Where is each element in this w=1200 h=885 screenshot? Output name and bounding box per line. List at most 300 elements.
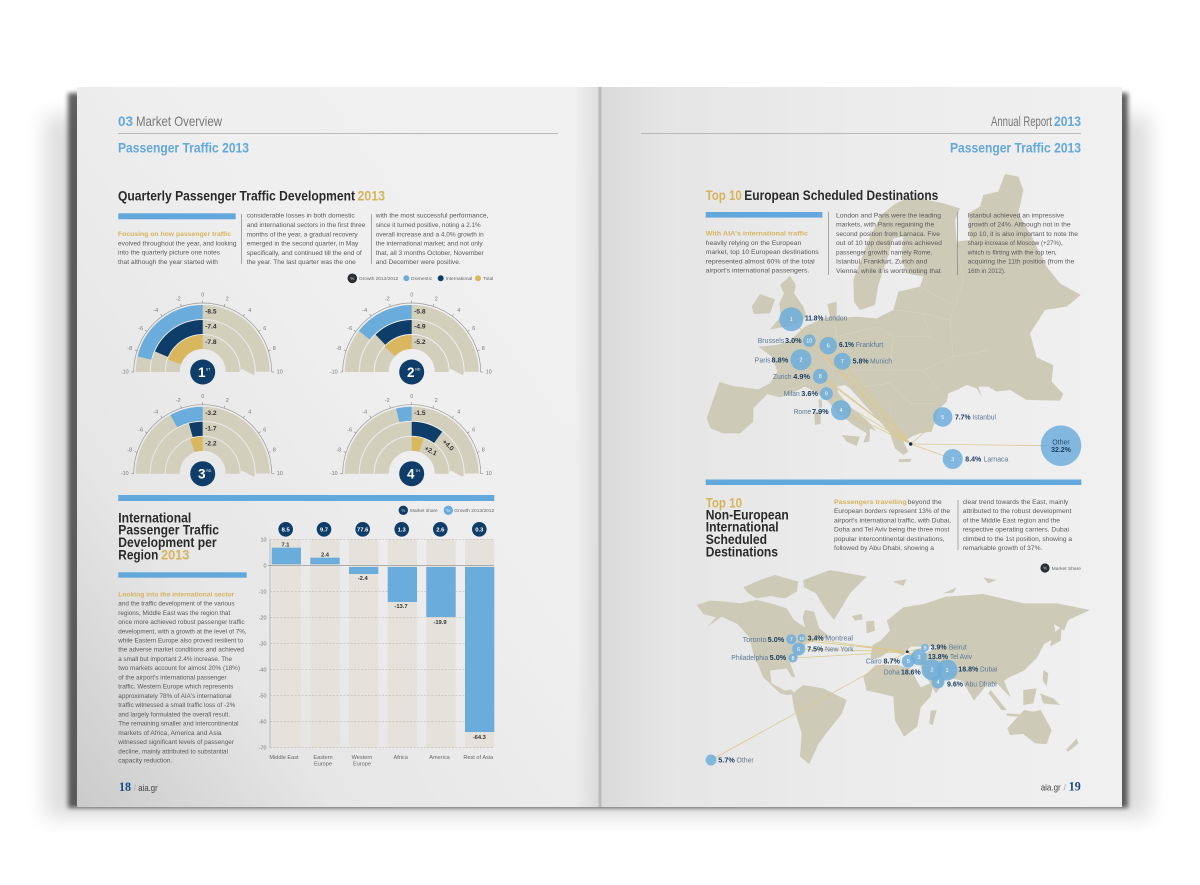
gutter shading: [575, 87, 599, 807]
heading: non-european destinations: Top 10: [706, 495, 742, 510]
text: europe: Vienna, while it is worth noting that: [836, 268, 941, 275]
body text: international sector: traffic. Western Europe which represents: [118, 684, 234, 691]
gauge: third quarter: 4: [248, 410, 251, 416]
y axis labels: -30: [259, 642, 266, 648]
region labels: [269, 755, 494, 768]
labels: european destinations: Brussels: [758, 338, 785, 345]
intro text: quarterly: evolved throughout the year, and looking: [118, 240, 237, 247]
heading: non-european destinations: Destinations: [706, 544, 778, 559]
gauge: third quarter: 3: [198, 467, 206, 482]
bar chart legend: %: [401, 508, 405, 513]
y axis labels: -40: [259, 668, 266, 674]
intro text: quarterly: emerged in the second quarter, in May: [247, 240, 359, 248]
body text: international sector: the adverse market conditions and achieved: [118, 647, 244, 654]
gauge: first quarter: -7.4: [205, 324, 217, 331]
gauge: first quarter: -4: [153, 308, 158, 314]
gauge: third quarter: 2: [226, 398, 229, 404]
body text: international sector: approximately 78% of AIA's international: [118, 693, 232, 700]
left page header: 03: [118, 114, 133, 129]
gauge: first quarter: 8: [273, 346, 276, 352]
labels: world destinations: Toronto: [743, 637, 767, 644]
gauge: third quarter: 10: [277, 471, 283, 477]
gauge: fourth quarter: -6: [347, 428, 352, 434]
bar chart legend: [399, 506, 495, 515]
intro text: quarterly: and international sectors in the first three: [247, 222, 366, 229]
heading: international passenger traffic development: Region: [118, 547, 158, 562]
text: europe: markets, with Paris regaining the: [836, 222, 935, 229]
market share legend: [1040, 563, 1081, 573]
labels: world destinations: Tel Aviv: [950, 654, 972, 661]
labels: european destinations: Other: [1052, 440, 1070, 447]
gauge: first quarter: 1: [198, 365, 206, 380]
body text: international sector: two markets account for almost 20% (18%): [118, 665, 240, 672]
gauge: fourth quarter: 2: [435, 398, 438, 404]
left page footer: /: [134, 783, 136, 793]
intro text: quarterly: the year. The last quarter was the one: [247, 259, 356, 266]
europe heading: Top 10: [706, 188, 742, 203]
bubbles: world destinations: 2: [930, 668, 934, 674]
gauge: third quarter: RD: [206, 469, 212, 473]
market share badges: [278, 522, 487, 537]
gauge: second quarter: 10: [486, 370, 492, 376]
bar chart legend: %: [446, 508, 450, 513]
text: non-european: clear trend towards the East, mainly: [963, 499, 1069, 506]
body text: international sector: [117, 572, 247, 765]
labels: european destinations: Larnaca: [984, 457, 1008, 464]
intro text: quarterly: since it turned positive, noting a 2.1%: [376, 222, 481, 229]
labels: european destinations: 6.1%: [839, 342, 855, 349]
text: europe: acquiring the 11th position (from the: [968, 258, 1075, 266]
bar chart: growth per region: [259, 522, 494, 768]
body text: international sector: while Eastern Europe also proved resilient to: [117, 638, 243, 644]
bar chart legend: Growth 2013/2012: [454, 508, 495, 514]
right page footer: [1041, 780, 1081, 794]
intro text: quarterly: [118, 213, 489, 266]
labels: european destinations: 32.2%: [1051, 447, 1072, 454]
heading: non-european destinations: Non-European: [706, 508, 789, 522]
bubbles: european destinations: 6: [827, 344, 830, 350]
region labels: Africa: [394, 755, 409, 761]
labels: european destinations: Milan: [784, 391, 800, 398]
gauge: first quarter: -8: [127, 346, 132, 352]
text: europe: out of 10 top destinations achieved: [836, 240, 942, 247]
labels: world destinations: 9.6%: [947, 682, 964, 689]
heading: international passenger traffic development: International: [118, 510, 191, 525]
labels: european destinations: 7.7%: [955, 414, 971, 421]
heading: international passenger traffic development: Development per: [118, 535, 217, 550]
page shadow: [45, 93, 1150, 818]
labels: world destinations: 3.9%: [931, 645, 947, 652]
text: non-european: beyond the: [908, 499, 942, 506]
gauge: first quarter: 10: [277, 370, 283, 376]
labels: world destinations: Philadelphia: [731, 655, 768, 662]
gauge: first quarter: -2: [176, 296, 181, 302]
right page header: Passenger Traffic 2013: [950, 141, 1081, 156]
gauge: second quarter: 2: [435, 296, 438, 302]
labels: world destinations: Montreal: [825, 635, 853, 642]
gauge: second quarter: -5.2: [414, 339, 426, 346]
labels: world destinations: Abu Dhabi: [965, 682, 997, 689]
heading: international passenger traffic development: 2013: [161, 547, 190, 562]
labels: european destinations: Istanbul: [972, 414, 996, 421]
region labels: America: [429, 755, 451, 761]
labels: european destinations: Frankfurt: [856, 342, 883, 349]
labels: european destinations: 3.6%: [801, 391, 819, 398]
text: europe: growth of 24%. Although not in the: [968, 222, 1071, 229]
bubbles: world destinations: 8: [791, 656, 795, 662]
intro text: quarterly: into the quarterly picture one notes: [118, 250, 221, 257]
bar chart legend: Market share: [410, 508, 438, 514]
bubbles: european destinations: 7: [841, 359, 844, 365]
labels: world destinations: 18.8%: [958, 667, 979, 674]
region labels: Eastern: [313, 755, 333, 761]
text: europe: represented almost 60% of the total: [706, 258, 815, 265]
gauge: second quarter: -2: [385, 296, 390, 302]
intro text: quarterly: and December were positive.: [376, 259, 461, 266]
bubbles: world destinations: [706, 634, 958, 766]
bubbles: world destinations: 1: [945, 668, 949, 674]
body text: international sector: decline, mainly attributed to substantial: [118, 748, 228, 755]
bubbles: european destinations: 1: [790, 317, 793, 323]
body text: international sector: of the airport's international passenger: [118, 674, 227, 682]
body text: international sector: once more achieved robust passenger traffic: [118, 619, 245, 626]
labels: european destinations: Munich: [870, 359, 892, 366]
gauge legend: %: [350, 276, 354, 281]
text: europe: top 10, it is also important to note the: [968, 231, 1078, 238]
labels: world destinations: 18.6%: [901, 670, 921, 677]
map: world: [697, 570, 1090, 764]
text: europe: market, top 10 European destinations: [706, 249, 819, 256]
gauge: first quarter: -7.8: [205, 339, 217, 346]
body text: international sector: The remaining smaller and intercontinental: [118, 721, 239, 728]
heading: international passenger traffic development: Passenger Traffic: [118, 522, 219, 538]
labels: world destinations: Cairo: [866, 659, 882, 666]
heading: quarterly passenger traffic development: 2013: [358, 188, 385, 203]
intro text: quarterly: Focusing on how passenger traffic: [118, 231, 231, 238]
gauge: first quarter: 2: [226, 296, 229, 302]
gauge: third quarter: 0: [201, 394, 204, 400]
heading: non-european destinations: Scheduled: [706, 532, 767, 547]
labels: world destinations: 8.7%: [884, 659, 901, 666]
gauge: fourth quarter: -10: [330, 471, 338, 477]
market share badges: 1.3: [398, 527, 407, 533]
bar values: -2.4: [358, 576, 368, 582]
bubbles: european destinations: 5: [941, 415, 944, 421]
body text: international sector: capacity reduction.: [118, 758, 172, 765]
heading: international passenger traffic development: [118, 510, 219, 562]
bar values: -64.3: [473, 735, 487, 741]
region labels: Europe: [353, 762, 371, 768]
labels: world destinations: New York: [825, 647, 854, 654]
gauge: first quarter: -8.5: [205, 308, 217, 316]
bar values: -19.9: [433, 620, 447, 626]
market share badges: 0.3: [475, 527, 484, 533]
bar values: 7.1: [281, 542, 290, 548]
text: non-european: remarkable growth of 37%.: [963, 545, 1042, 552]
heading: quarterly passenger traffic development: Quarterly Passenger Traffic Development: [118, 188, 355, 203]
labels: european destinations: 3.0%: [785, 338, 802, 345]
gauge: second quarter: 8: [482, 346, 485, 352]
labels: world destinations: 13.8%: [928, 654, 949, 661]
body text: international sector: development, with a growth at the level of 7%,: [118, 628, 247, 635]
right page footer: 19: [1069, 780, 1081, 794]
market share badges: 9.7: [320, 527, 328, 533]
body text: international sector: traffic witnessed a small traffic loss of -2%: [118, 702, 235, 709]
market share badges: 2.6: [436, 527, 445, 533]
gauge: second quarter: -6: [347, 326, 352, 332]
labels: european destinations: 5.8%: [853, 359, 869, 366]
labels: world destinations: 5.7%: [718, 757, 736, 764]
market share legend: Market Share: [1052, 566, 1081, 572]
gauge: fourth quarter: -1.5: [414, 410, 426, 417]
text: europe: second position from Larnaca. Five: [836, 231, 940, 238]
europe heading: European Scheduled Destinations: [744, 188, 938, 203]
gauge: fourth quarter: 10: [486, 471, 492, 477]
text: non-european: European borders represent 13% of the: [834, 508, 950, 515]
route lines: world: [711, 638, 947, 760]
labels: world destinations: 7.5%: [807, 647, 824, 654]
bubbles: world destinations: 4: [936, 680, 940, 686]
gauge: first quarter: ST: [206, 368, 211, 372]
body text: international sector: regions, Middle East was the region that: [118, 610, 230, 617]
bubbles: world destinations: 10: [799, 636, 805, 641]
gauge: second quarter: -4.9: [414, 324, 426, 331]
text: europe: heavily relying on the European: [706, 240, 802, 247]
bar values: -13.7: [394, 604, 408, 610]
heading: non-european destinations: [706, 495, 789, 559]
text: europe: London and Paris were the leading: [836, 212, 941, 219]
gauge: second quarter: -8: [336, 346, 341, 352]
bubbles: world destinations: 3: [917, 655, 921, 661]
y axis labels: -10: [259, 589, 266, 595]
bubbles: european destinations: 9: [825, 392, 828, 398]
market share badges: 8.5: [282, 527, 291, 533]
labels: european destinations: Zurich: [773, 374, 792, 381]
gauge: third quarter: -4: [153, 410, 158, 416]
bubbles: european destinations: [779, 307, 1081, 469]
bubbles: european destinations: 8: [819, 374, 822, 380]
text: europe: which is flirting with the top ten,: [967, 249, 1057, 256]
gauge: second quarter: 2: [407, 365, 414, 380]
gauge: second quarter: 0: [410, 292, 413, 298]
gauge: first quarter: -6: [138, 326, 143, 332]
bar values: 2.4: [321, 552, 330, 558]
y axis labels: -70: [259, 746, 266, 752]
gauge: first quarter: 6: [263, 326, 266, 332]
gauge legend: Total: [483, 276, 493, 282]
bubbles: world destinations: 5: [907, 659, 910, 665]
bubbles: world destinations: 6: [797, 647, 800, 653]
gauge: third quarter: 8: [273, 448, 276, 454]
gauge: fourth quarter: -8: [336, 448, 341, 454]
gauge: second quarter: ND: [415, 368, 421, 372]
intro text: quarterly: the international market; and not only: [376, 240, 483, 248]
y axis labels: -60: [259, 720, 266, 726]
gauge: fourth quarter: 8: [482, 448, 485, 454]
gauge legend: Domestic: [411, 276, 433, 282]
labels: european destinations: 11.8%: [805, 316, 824, 323]
labels: european destinations: 7.9%: [812, 409, 829, 416]
intro text: quarterly: months of the year, a gradual recovery: [247, 231, 358, 238]
text: non-european: popular intercontinental destinations,: [834, 536, 945, 543]
right page header: Annual Report: [991, 114, 1052, 129]
intro text: quarterly: considerable losses in both domestic: [247, 213, 355, 220]
labels: european destinations: 8.8%: [772, 358, 789, 365]
gauge: third quarter: -1.7: [205, 425, 217, 432]
right page header: [641, 114, 1081, 156]
y axis labels: -50: [259, 694, 266, 700]
bubbles: european destinations: 2: [799, 358, 803, 364]
labels: world destinations: Dubai: [980, 667, 998, 674]
gauge: third quarter: -6: [138, 428, 143, 434]
gauge legend: [348, 274, 493, 283]
region labels: Europe: [314, 762, 332, 768]
bubbles: european destinations: 10: [806, 339, 812, 345]
text: non-european: respective operating carriers. Dubai: [963, 527, 1069, 534]
gauge: second quarter: 6: [472, 326, 475, 332]
text: non-european: Doha and Tel Aviv being the three most: [834, 527, 949, 534]
text: non-european: climbed to the 1st position, showing a: [963, 536, 1072, 543]
gauge: fourth quarter: -2: [385, 398, 390, 404]
right page footer: aia.gr: [1041, 783, 1061, 794]
right page footer: /: [1064, 783, 1066, 793]
gauge: fourth quarter: -4: [362, 410, 367, 416]
text: non-european: attributed to the robust development: [963, 508, 1072, 515]
map: Europe: [707, 174, 1081, 462]
gauge: fourth quarter: 4: [407, 467, 415, 482]
bar values: [281, 542, 487, 741]
labels: world destinations: Doha: [884, 670, 900, 677]
gauge: first quarter: -10: [121, 370, 129, 376]
y axis labels: [259, 537, 266, 752]
labels: world destinations: Other: [736, 757, 754, 764]
gauge: first quarter: 4: [248, 308, 251, 314]
labels: european destinations: Paris: [755, 358, 771, 365]
route lines: Europe: [791, 319, 1061, 459]
body text: international sector: witnessed significant levels of passenger: [117, 739, 235, 746]
gauge: fourth quarter: 0: [410, 394, 413, 400]
text: europe: With AIA's international traffic: [706, 231, 808, 238]
intro text: quarterly: overall increase and a 4.0% growth in: [376, 231, 484, 238]
text: non-european: airport's international traffic, with Dubai,: [834, 518, 951, 524]
gauge: fourth quarter: 6: [472, 428, 475, 434]
text: europe: sharp increase of Moscow (+27%),: [968, 240, 1063, 247]
labels: european destinations: 4.9%: [793, 374, 811, 381]
region labels: Western: [352, 755, 372, 761]
region labels: Rest of Asia: [463, 755, 494, 761]
text: europe: Istanbul achieved an impressive: [968, 212, 1064, 219]
labels: world destinations: 5.0%: [768, 637, 785, 644]
left page header: Passenger Traffic 2013: [118, 141, 249, 156]
gauge: fourth quarter: +4.0: [441, 439, 455, 453]
bubbles: european destinations: 4: [839, 408, 843, 414]
labels: european destinations: 8.4%: [965, 457, 982, 464]
region labels: Middle East: [269, 755, 299, 761]
gauge: third quarter: [121, 392, 284, 555]
text: europe: Istanbul, Frankfurt, Zurich and: [836, 258, 928, 266]
book spine: [598, 87, 602, 807]
chart columns: [272, 539, 494, 748]
gauge: third quarter: -2.2: [205, 441, 217, 448]
right page background: [601, 87, 1122, 807]
text: europe: airport's international passengers.: [706, 268, 809, 275]
body text: international sector: and the traffic development of the various: [118, 600, 235, 608]
labels: european destinations: Rome: [794, 409, 811, 416]
left page footer: 18: [119, 780, 131, 794]
y axis labels: 0: [264, 563, 266, 569]
gauge: fourth quarter: +2.1: [423, 445, 438, 458]
intro text: quarterly: that, all 3 months October, November: [376, 250, 484, 257]
gauge: third quarter: -10: [121, 471, 129, 477]
growth bars: [272, 548, 494, 732]
text: non-european: [834, 499, 1072, 552]
gauge: fourth quarter: TH: [415, 469, 420, 473]
text: non-european: followed by Abu Dhabi, showing a: [834, 545, 934, 552]
body text: international sector: Looking into the international sector: [118, 591, 235, 598]
gauge: third quarter: 6: [263, 428, 266, 434]
labels: european destinations: [755, 316, 1072, 464]
body text: international sector: a small but important 2.4% increase. The: [118, 656, 232, 663]
gauge: first quarter: 0: [201, 292, 204, 298]
labels: european destinations: London: [825, 316, 847, 323]
left page header: Market Overview: [136, 114, 222, 129]
labels: world destinations: 3.4%: [808, 635, 824, 642]
gauge: second quarter: -5.8: [414, 308, 426, 316]
left page header: [118, 114, 558, 156]
text: europe: 16th in 2012).: [968, 268, 1006, 275]
gauge: third quarter: -2: [176, 398, 181, 404]
text: europe: [706, 212, 1078, 275]
gauge: third quarter: -8: [127, 448, 132, 454]
gauge: second quarter: 4: [457, 308, 460, 314]
gauge legend: International: [446, 276, 472, 282]
text: europe: passenger growth, namely Rome,: [836, 249, 932, 256]
right page header: 2013: [1054, 114, 1081, 129]
bubbles: european destinations: 3: [951, 457, 954, 463]
market share legend: %: [1043, 566, 1047, 571]
text: non-european: of the Middle East region and the: [963, 518, 1060, 524]
divider bar: non-european section: [706, 480, 1081, 485]
bubbles: world destinations: 7: [790, 637, 793, 643]
heading: non-european destinations: International: [706, 520, 779, 535]
y axis labels: -20: [259, 616, 266, 622]
labels: world destinations: [718, 635, 998, 764]
text: non-european: Passengers travelling: [834, 499, 907, 506]
body text: international sector: markets of Africa, America and Asia: [118, 730, 222, 737]
gauge: second quarter: -10: [330, 370, 338, 376]
gauge legend: Growth 2013/2012: [359, 276, 399, 282]
labels: world destinations: 5.0%: [770, 655, 787, 662]
intro text: quarterly: with the most successful performance,: [375, 213, 489, 220]
left page footer: [119, 780, 158, 794]
gauge: third quarter: -3.2: [205, 410, 217, 417]
y axis labels: 10: [260, 537, 266, 543]
gauge: fourth quarter: 4: [457, 410, 460, 416]
intro text: quarterly: that although the year started with: [118, 259, 218, 266]
left page background: [77, 87, 599, 807]
gauge: second quarter: -4: [362, 308, 367, 314]
left page footer: aia.gr: [138, 783, 158, 794]
gauge: first quarter: [121, 292, 283, 444]
labels: world destinations: Beirut: [949, 645, 967, 652]
gauge: fourth quarter: [330, 394, 492, 546]
body text: international sector: and largely formulated the overall result.: [118, 711, 230, 718]
intro text: quarterly: specifically, and continued till the end of: [247, 250, 362, 257]
gauge: second quarter: [328, 288, 496, 456]
divider bar: regional section: [118, 495, 494, 501]
market share badges: 77.6: [357, 527, 369, 533]
open brochure spread: [77, 87, 1122, 807]
